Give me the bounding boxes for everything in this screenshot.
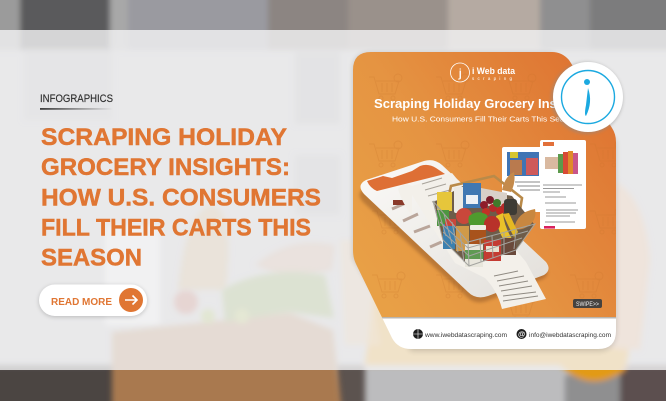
arrow icon [119, 288, 143, 312]
product card: sparkling drinks [540, 140, 586, 229]
promo card [353, 52, 623, 350]
card logo: i Web data [472, 66, 516, 77]
main heading [41, 124, 321, 272]
card logo: scraping [472, 76, 512, 81]
main heading: SCRAPING HOLIDAY [41, 124, 287, 151]
basket handle [449, 176, 522, 210]
card subtitle: How U.S. Consumers Fill Their Carts This Season [392, 114, 578, 124]
basket interior backing [434, 186, 534, 266]
product card: toaster pastries [502, 147, 544, 212]
section label: infographics: INFOGRAPHICS [40, 93, 113, 105]
card logo [450, 63, 516, 82]
receipt [398, 173, 546, 309]
white footer strip [382, 317, 616, 349]
swipe badge [573, 299, 602, 308]
main heading: HOW U.S. CONSUMERS [41, 184, 321, 212]
email contact [516, 329, 611, 339]
card shadow [353, 53, 616, 351]
read more button [39, 284, 147, 316]
read more button: READ MORE [51, 296, 112, 308]
main heading: GROCERY INSIGHTS: [41, 154, 290, 181]
logo badge [551, 62, 623, 134]
main heading: FILL THEIR CARTS THIS [41, 214, 311, 242]
website contact [413, 329, 508, 339]
card logo: j [457, 66, 462, 80]
cart watermark pattern [369, 93, 533, 316]
email contact: info@iwebdatascraping.com [529, 332, 611, 339]
swipe badge: SWIPE>> [576, 301, 599, 308]
grocery basket [433, 172, 535, 267]
wire cage [433, 201, 535, 266]
email contact: @ [518, 330, 525, 338]
main heading: SEASON [41, 244, 142, 272]
website contact: www.iwebdatascraping.com [424, 332, 508, 339]
card title: Scraping Holiday Grocery Insights [374, 97, 588, 111]
phone app header [367, 165, 445, 191]
section label: infographics [40, 93, 113, 110]
phone with receipt [359, 160, 549, 309]
